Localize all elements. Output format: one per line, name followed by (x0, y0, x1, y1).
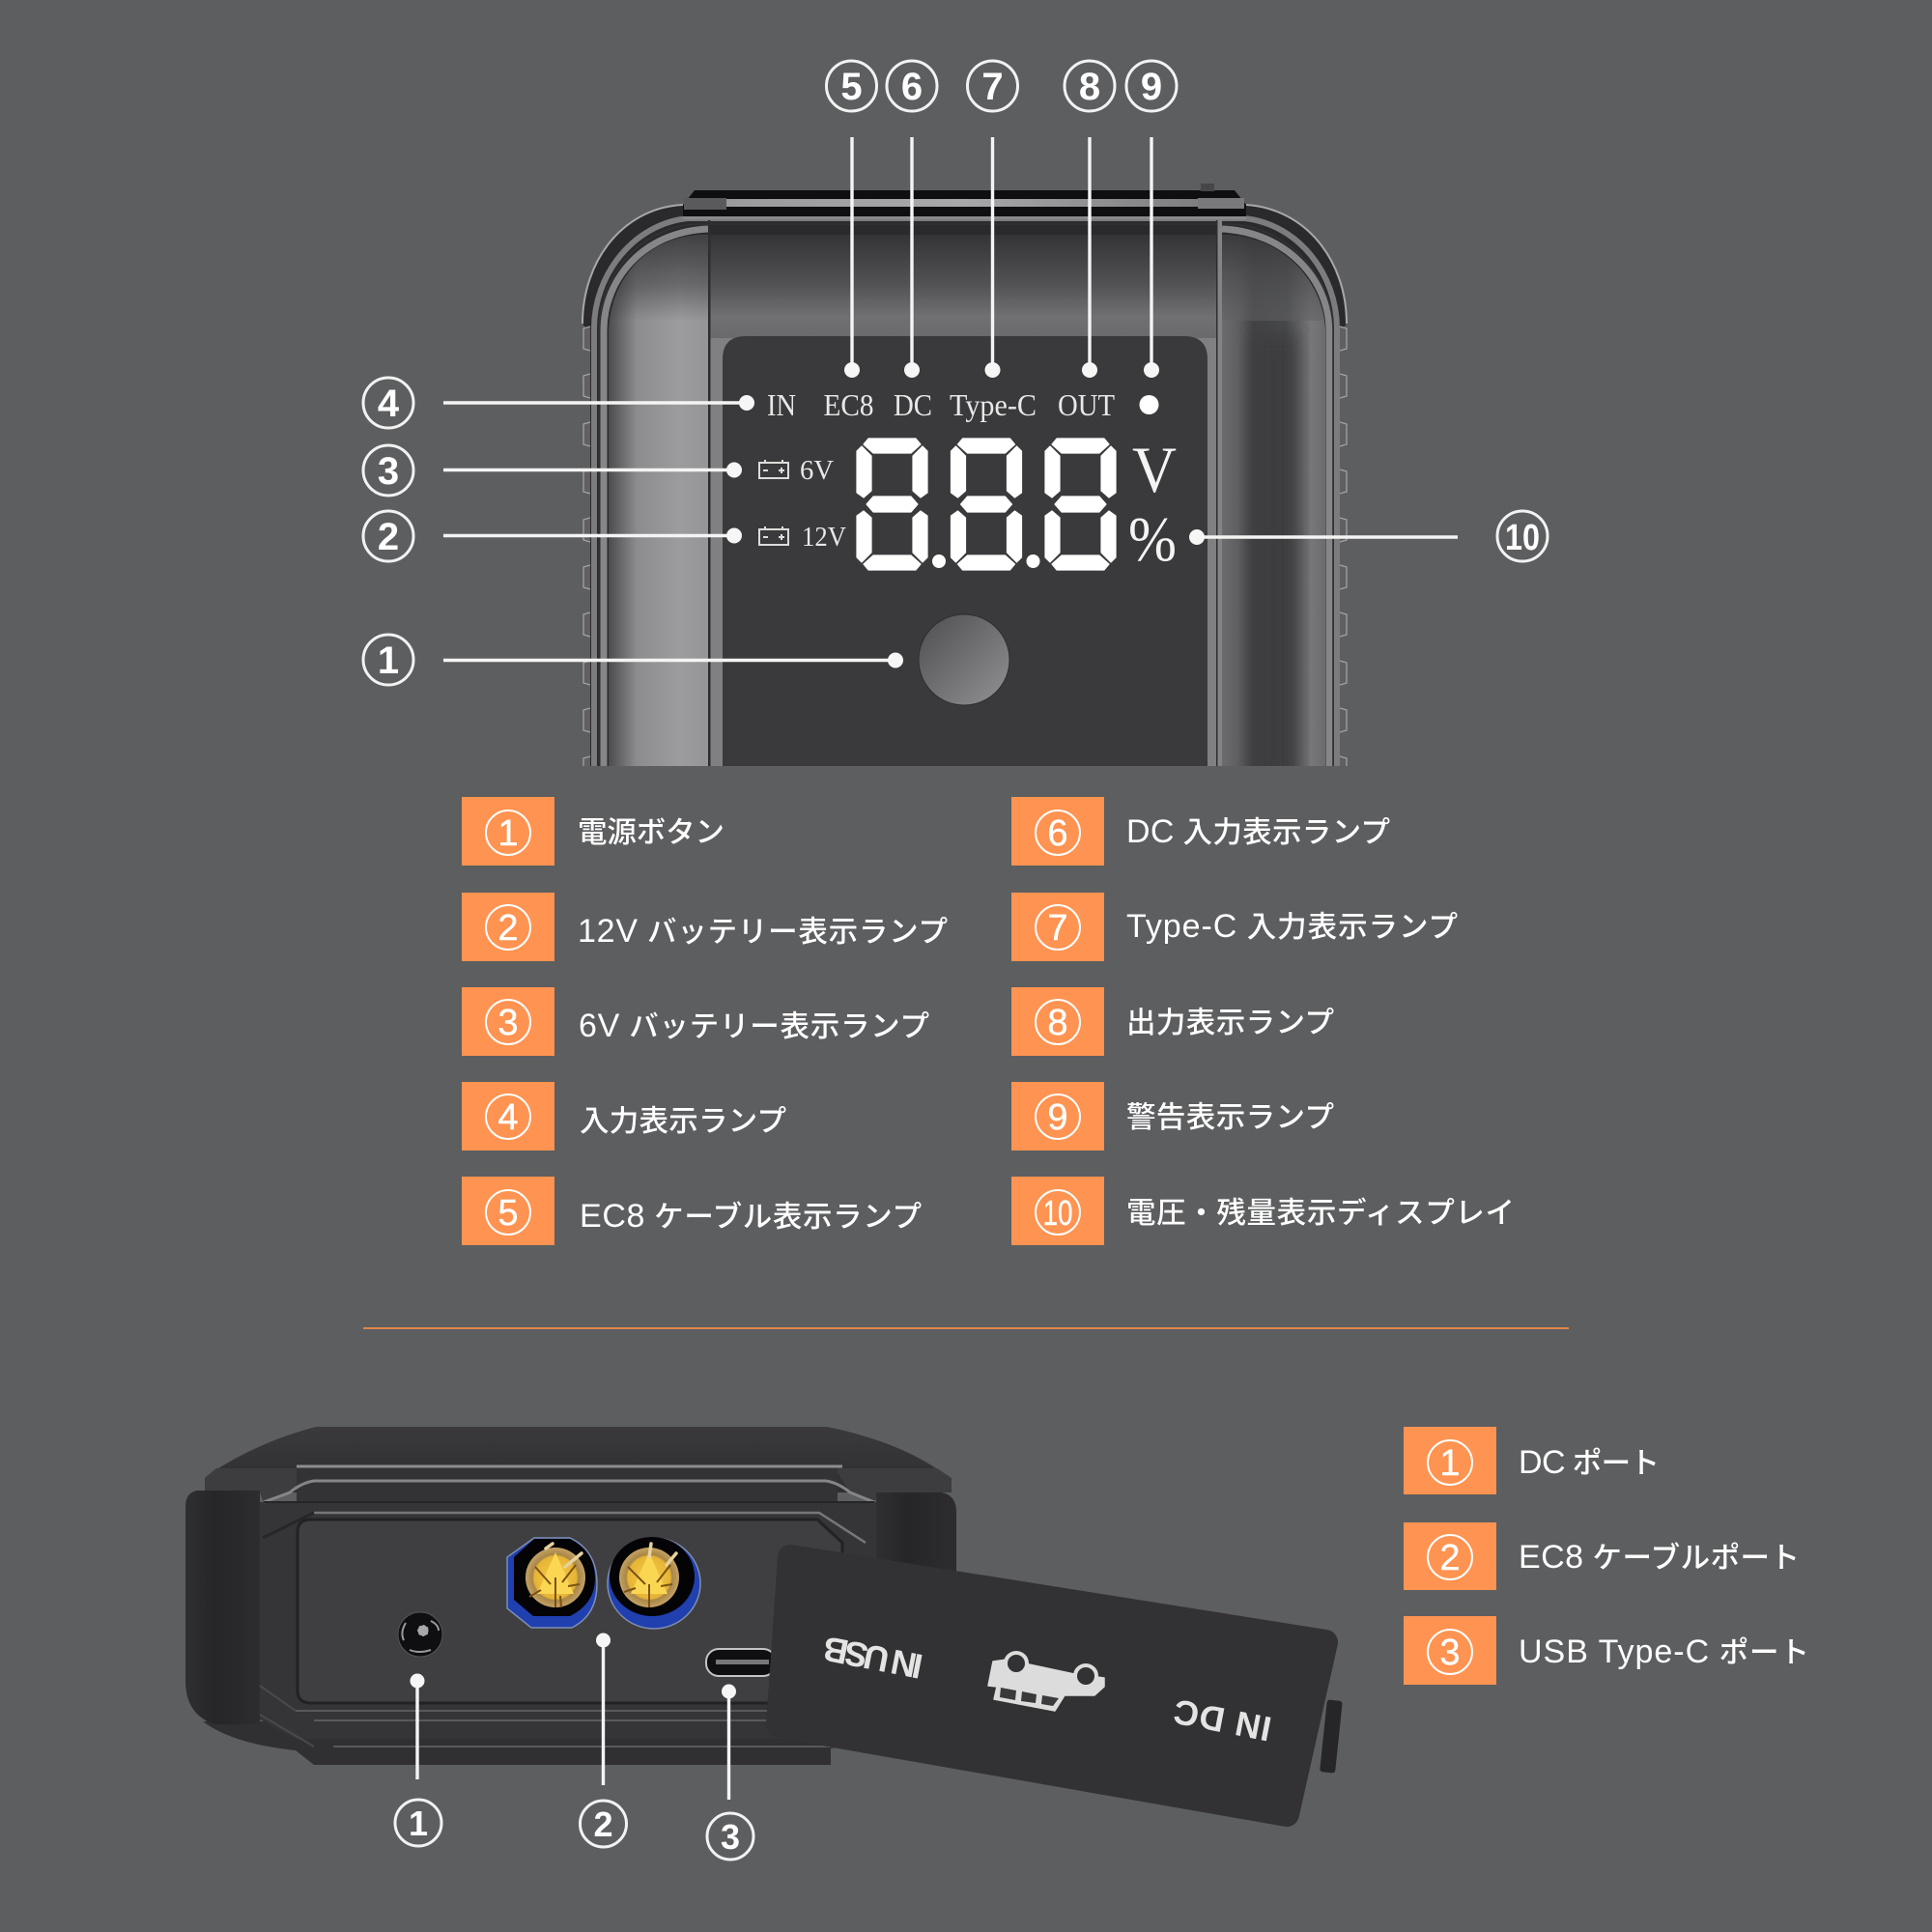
legend item 9: 9 (1047, 1097, 1068, 1138)
display labels: 12V (802, 522, 846, 553)
legend item 3 (462, 987, 929, 1056)
callout 6: 6 (901, 66, 923, 108)
unit labels V and percent: V (1132, 433, 1177, 506)
removable cover (779, 1557, 1325, 1814)
legend item 4: 入力表示ランプ (580, 1105, 786, 1138)
callout 2 (363, 511, 742, 561)
bottom callout 3 (707, 1685, 753, 1860)
legend item 6 (1011, 797, 1390, 866)
legend item 2: 2 (497, 908, 519, 949)
callout 3 (363, 445, 742, 496)
legend item 5: 5 (497, 1193, 519, 1234)
legend item 2 (462, 893, 948, 961)
unit labels V and percent (1128, 433, 1177, 575)
DC port (398, 1612, 442, 1657)
display panel (723, 336, 1208, 773)
port legend item 2: 2 (1439, 1538, 1461, 1578)
port legend item 2: EC8 ケーブルポート (1519, 1539, 1800, 1576)
callout 8: 8 (1079, 66, 1100, 108)
bottom callout 3: 3 (721, 1817, 740, 1857)
port legend item 3 (1404, 1616, 1809, 1685)
port legend item 1 (1404, 1427, 1660, 1494)
callout 2: 2 (378, 516, 399, 558)
display labels: 6V (800, 455, 834, 486)
USB Type-C port (706, 1649, 776, 1676)
cover tab (1320, 1699, 1343, 1774)
upper band (297, 1466, 838, 1505)
port legend item 2 (1404, 1522, 1800, 1590)
seven segment display 88.8 (857, 439, 1116, 570)
legend item 3: 3 (497, 1003, 519, 1043)
display labels: OUT (1058, 387, 1115, 422)
callout 5: 5 (840, 66, 863, 108)
legend item 10: 電圧・残量表示ディスプレイ (1126, 1197, 1515, 1230)
callout 9 (1126, 61, 1177, 378)
side bumper right (876, 1492, 956, 1724)
callout 9: 9 (1141, 66, 1162, 108)
display labels: EC8 (823, 387, 873, 422)
legend item 6: 6 (1047, 813, 1068, 854)
legend item 5: EC8 ケーブル表示ランプ (580, 1198, 922, 1235)
display labels: Type-C (950, 387, 1037, 422)
cover text IN DC: IN DC (1170, 1691, 1274, 1749)
bottom callout 1: 1 (409, 1804, 428, 1843)
legend item 8: 8 (1047, 1003, 1068, 1043)
port legend item 3: USB Type-C ポート (1519, 1634, 1809, 1670)
callout 7: 7 (981, 66, 1004, 108)
device outer shell (582, 205, 1347, 773)
callout 6 (887, 61, 937, 378)
shell rings (594, 218, 1337, 773)
EC8 connector left (507, 1538, 597, 1628)
side grip ribs (583, 327, 1347, 781)
callout 4 (363, 378, 754, 428)
legend item 9 (1011, 1082, 1334, 1151)
shoulder ledges (205, 1468, 952, 1503)
device inner surfaces (609, 218, 1327, 787)
legend item 7 (1011, 893, 1458, 961)
lower ledge (203, 1721, 903, 1765)
legend item 1 (462, 797, 724, 866)
legend item 3: 6V バッテリー表示ランプ (579, 1008, 929, 1044)
legend item 6: DC 入力表示ランプ (1126, 813, 1390, 850)
display labels (767, 387, 1159, 553)
legend item 9: 警告表示ランプ (1126, 1101, 1334, 1134)
display labels: DC (894, 387, 932, 422)
bevel highlights (260, 1466, 874, 1747)
legend item 8: 出力表示ランプ (1126, 1007, 1334, 1039)
callout 8 (1065, 61, 1115, 378)
legend item 10 (1011, 1177, 1515, 1245)
frame (260, 1502, 876, 1739)
icon: battery 12V (759, 526, 788, 545)
bottom callout 1 (395, 1673, 441, 1846)
callout 5 (827, 61, 877, 378)
cover icon: car (988, 1653, 1104, 1711)
port legend item 1: 1 (1439, 1443, 1461, 1484)
callout 10 (1189, 511, 1548, 561)
callout 4: 4 (378, 383, 400, 425)
port legend item 1: DC ポート (1519, 1444, 1660, 1481)
legend item 5 (462, 1177, 922, 1245)
side bumper left (185, 1491, 260, 1724)
device: bottom view with ports (185, 1427, 956, 1765)
callout 7 (968, 61, 1018, 378)
recessed port panel (298, 1520, 842, 1703)
bottom callout 2 (580, 1633, 626, 1847)
legend item 2: 12V バッテリー表示ランプ (578, 913, 948, 950)
top hinge bar (683, 184, 1246, 219)
cover text IN USB: IN USB (819, 1629, 925, 1687)
legend item 7: 7 (1047, 908, 1068, 949)
legend item 1: 電源ボタン (578, 816, 724, 849)
EC8 connector right (608, 1537, 700, 1629)
callout 1: 1 (378, 639, 399, 682)
top cap (215, 1427, 942, 1492)
unit labels V and percent: % (1128, 504, 1177, 575)
legend item 4: 4 (497, 1097, 519, 1138)
legend item 8 (1011, 987, 1334, 1056)
legend item 10: 10 (1043, 1193, 1072, 1233)
callout 10: 10 (1505, 518, 1540, 558)
port legend item 3: 3 (1439, 1633, 1461, 1673)
callout 1 (363, 635, 903, 685)
legend item 1: 1 (497, 813, 519, 854)
power button (919, 614, 1009, 705)
bottom callout 2: 2 (593, 1804, 613, 1844)
display labels: IN (767, 387, 796, 422)
icon: battery 6V (759, 460, 788, 478)
legend item 4 (462, 1082, 786, 1151)
callout 3: 3 (378, 450, 399, 493)
legend item 7: Type-C 入力表示ランプ (1126, 908, 1458, 945)
device: front view with display (582, 184, 1347, 787)
